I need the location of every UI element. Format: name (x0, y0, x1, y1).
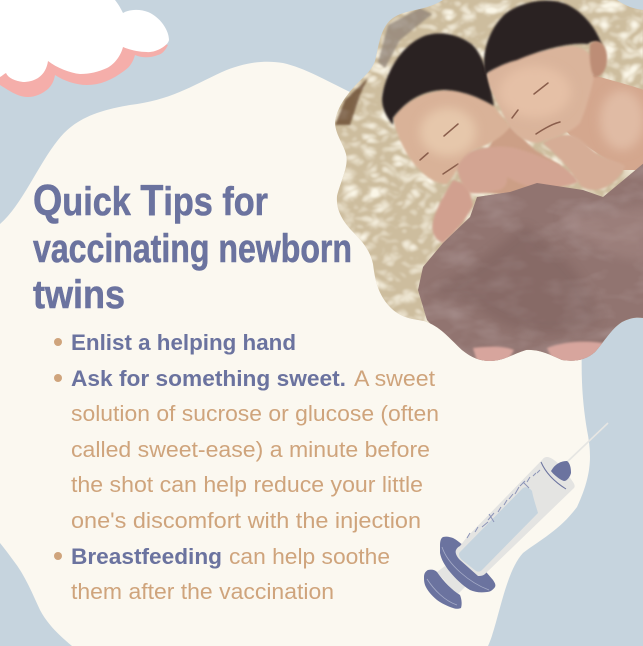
left baby hair (382, 33, 494, 125)
right baby hair (484, 1, 602, 75)
bullet: breastfeeding: can help soothe (229, 544, 390, 569)
title: Quick Tips for (33, 176, 268, 225)
right baby ear (590, 41, 607, 77)
plunger rod (437, 566, 465, 595)
bullet: ask for something sweet: Ask for something sweet. (71, 366, 346, 391)
bullet: enlist a helping hand: Enlist a helping hand (71, 330, 296, 355)
cloud body (0, 0, 169, 82)
hub (551, 461, 571, 481)
flange highlights (427, 547, 489, 605)
wrapped mauve blanket (418, 164, 643, 361)
bullet: breastfeeding: them after the vaccination (71, 579, 334, 604)
needle (566, 423, 608, 463)
shoulder line (541, 462, 566, 489)
liquid (459, 487, 538, 572)
baby toes (472, 340, 603, 361)
plunger end (424, 570, 462, 609)
bullet list (54, 330, 439, 604)
bullet: breastfeeding (54, 544, 390, 604)
title (33, 176, 352, 317)
cloud shadow (0, 30, 168, 97)
baby hand and forearm (457, 147, 578, 193)
left baby chest (483, 127, 560, 194)
bullet: ask for something sweet: called sweet-ease) a minute before (71, 437, 430, 462)
bullet: ask for something sweet: solution of sucrose or glucose (often (71, 401, 439, 426)
title: vaccinating newborn (33, 227, 352, 271)
bullet: breastfeeding: Breastfeeding (71, 544, 222, 569)
right baby body (567, 76, 643, 170)
icon: syringe (424, 423, 608, 609)
bullet: ask for something sweet: the shot can help reduce your little (71, 472, 423, 497)
right baby arm (543, 135, 625, 190)
right baby face (487, 46, 594, 143)
left baby face (393, 90, 510, 184)
barrel (456, 457, 575, 576)
flange (440, 537, 495, 592)
bullet: ask for something sweet (54, 366, 439, 533)
bullet: ask for something sweet: one's discomfort with the injection (71, 508, 421, 533)
fleece blanket background (330, 0, 643, 365)
left baby eye and mouth (420, 124, 458, 174)
photo: newborn twins (330, 0, 643, 370)
right baby shoulder highlight (600, 90, 643, 150)
title: twins (33, 273, 125, 317)
graduation marks (467, 470, 540, 538)
right baby eye and mouth (512, 83, 560, 134)
bullet: ask for something sweet: A sweet (354, 366, 435, 391)
left baby lower arm (432, 180, 473, 243)
cloud (0, 0, 169, 97)
